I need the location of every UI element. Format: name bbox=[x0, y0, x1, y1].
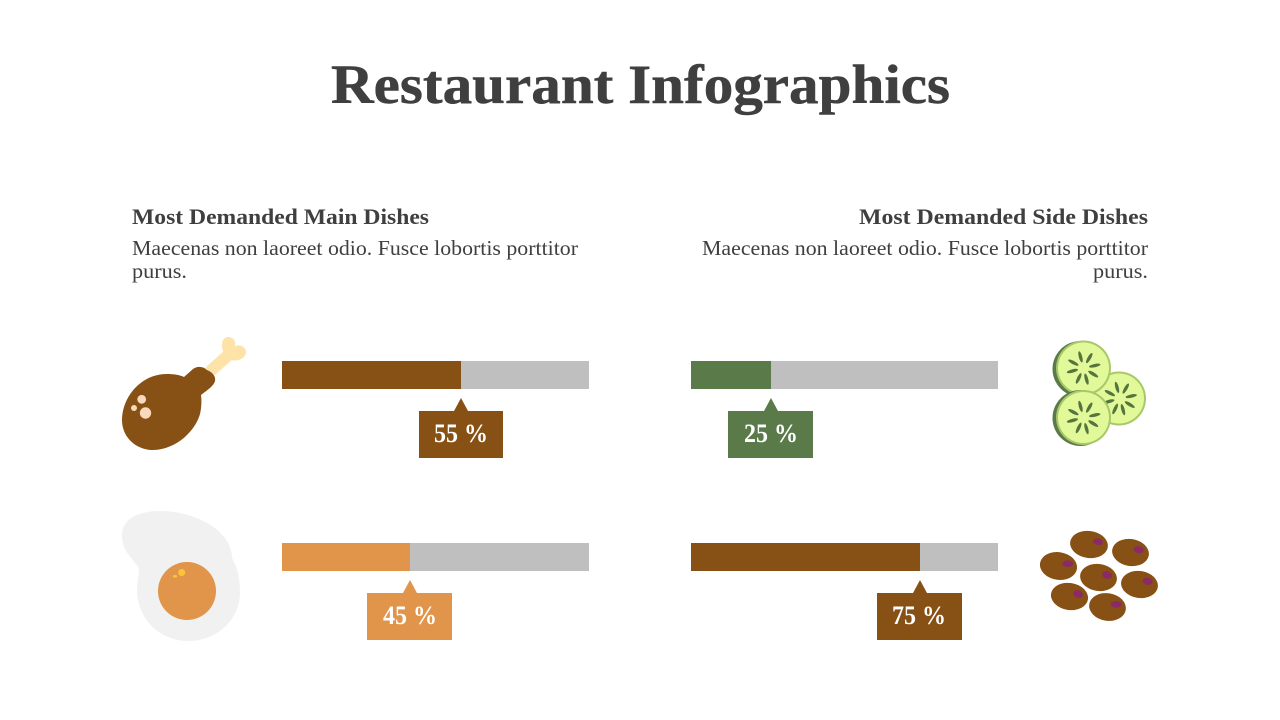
icon: coffee beans bbox=[1038, 528, 1160, 624]
callout: 45%: 45 % bbox=[383, 601, 437, 630]
description: side dishes: purus. bbox=[1093, 259, 1148, 283]
description: main dishes: Maecenas non laoreet odio. Fusce lobortis porttitor bbox=[132, 236, 578, 260]
title: Restaurant Infographics bbox=[331, 54, 950, 115]
callout: 25% bbox=[728, 398, 813, 458]
callout: 75% bbox=[877, 580, 962, 640]
icon: fried egg bbox=[122, 511, 240, 641]
bar: side dish 75% bbox=[691, 543, 998, 571]
description: main dishes bbox=[132, 236, 578, 283]
icon: cucumber slices bbox=[1052, 340, 1146, 446]
heading: main dishes: Most Demanded Main Dishes bbox=[132, 204, 429, 229]
heading: side dishes: Most Demanded Side Dishes bbox=[859, 204, 1148, 229]
callout: 45% bbox=[367, 580, 452, 640]
callout: 25%: 25 % bbox=[744, 419, 798, 448]
description: side dishes bbox=[702, 236, 1148, 283]
bar: main dish 55% bbox=[282, 361, 589, 389]
text block: side dishes bbox=[702, 204, 1148, 283]
text block: main dishes bbox=[132, 204, 578, 283]
bar: main dish 45% bbox=[282, 543, 589, 571]
icon: chicken drumstick bbox=[122, 337, 246, 450]
description: main dishes: purus. bbox=[132, 259, 187, 283]
callout: 75%: 75 % bbox=[892, 601, 946, 630]
callout: 55% bbox=[419, 398, 503, 458]
bar: side dish 25% bbox=[691, 361, 998, 389]
callout: 55%: 55 % bbox=[434, 419, 488, 448]
description: side dishes: Maecenas non laoreet odio. Fusce lobortis porttitor bbox=[702, 236, 1148, 260]
